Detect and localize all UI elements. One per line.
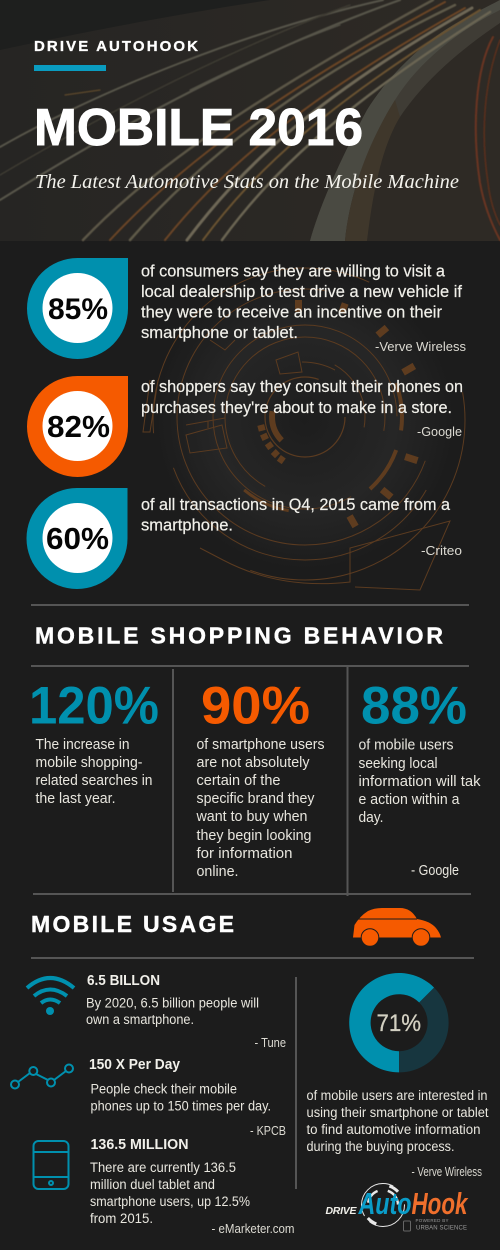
- column: 90 percent: [196, 676, 324, 880]
- subtitle: The Latest Automotive Stats on the Mobile Machine: [35, 171, 459, 193]
- usage: 136.5 million: [34, 1137, 294, 1236]
- column: 120 percent: mobile shopping-: [36, 754, 142, 771]
- stat: 85 percent: -Verve Wireless: [375, 339, 466, 354]
- stat: 82 percent: -Google: [417, 424, 462, 439]
- column: 88 percent: seeking local: [358, 755, 438, 772]
- stat text: of shoppers say they consult their phones on: [141, 378, 463, 396]
- logo: Drive AutoHook: POWERED BY: [416, 1218, 448, 1223]
- logo: Drive AutoHook: Hook: [412, 1186, 469, 1221]
- usage: 150 times per day: People check their mobile: [90, 1082, 237, 1096]
- column: 88 percent: of mobile users: [358, 736, 454, 754]
- stat: 85 percent: local dealership to test drive a new vehicle if: [141, 283, 462, 301]
- stat: 82 percent: [27, 376, 463, 477]
- column: 90 percent: are not absolutely: [196, 754, 310, 771]
- column: 90 percent: for information: [196, 845, 292, 862]
- stat: 60 percent: -Criteo: [421, 543, 462, 558]
- stat: 60 percent: 60%: [46, 521, 109, 556]
- column: 88 percent: - Google: [411, 862, 459, 879]
- icon: line chart: [11, 1064, 73, 1088]
- usage: 136.5 million: - eMarketer.com: [212, 1222, 294, 1236]
- orange drop badge: [27, 376, 128, 477]
- main title: MOBILE 2016: [34, 99, 363, 157]
- usage: 136.5 million: million duel tablet and: [90, 1177, 215, 1192]
- stat: 85 percent: [27, 258, 466, 359]
- stat: 85 percent: they were to receive an incentive on their: [141, 304, 443, 322]
- heading: mobile shopping behavior: MOBILE SHOPPING BEHAVIOR: [35, 622, 443, 648]
- donut caption: to find automotive information: [306, 1122, 480, 1137]
- usage: 136.5 million: There are currently 136.5: [90, 1160, 236, 1175]
- stat text: of all transactions in Q4, 2015 came from a: [141, 496, 451, 514]
- usage: 6.5 billion: 6.5 BILLON: [87, 973, 160, 989]
- column: 120 percent: the last year.: [36, 790, 116, 807]
- usage: 136.5 million: smartphone users, up 12.5%: [90, 1194, 250, 1209]
- usage: 150 times per day: 150 X Per Day: [89, 1057, 180, 1073]
- column: 90 percent: they begin looking: [196, 827, 312, 844]
- heading: mobile usage: MOBILE USAGE: [31, 911, 234, 937]
- column: 90 percent: online.: [196, 863, 238, 880]
- column: 120 percent: 120%: [29, 676, 159, 736]
- column: 88 percent: 88%: [361, 676, 467, 736]
- brand name: DRIVE AUTOHOOK: [34, 38, 198, 55]
- column: 88 percent: information will tak: [358, 773, 481, 790]
- usage: 6.5 billion: own a smartphone.: [86, 1012, 194, 1027]
- usage: 150 times per day: - KPCB: [250, 1124, 286, 1138]
- stat: 82 percent: purchases they're about to make in a store.: [141, 399, 452, 417]
- teal drop badge: [26, 488, 128, 589]
- donut chart: 71 percent: 71%: [376, 1010, 421, 1037]
- column: 88 percent: [358, 676, 481, 879]
- donut caption: - Verve Wireless: [412, 1165, 482, 1179]
- donut caption: using their smartphone or tablet: [306, 1105, 489, 1120]
- accent bar: [34, 65, 106, 71]
- column: 90 percent: want to buy when: [196, 808, 308, 825]
- column: 90 percent: of smartphone users: [196, 736, 324, 753]
- stat text: of consumers say they are willing to visit a: [141, 262, 446, 280]
- column: 120 percent: related searches in: [36, 772, 152, 789]
- usage: 150 times per day: phones up to 150 times per day.: [90, 1098, 271, 1114]
- donut caption: of mobile users are interested in: [306, 1088, 488, 1103]
- logo: Drive AutoHook: DRIVE: [326, 1205, 357, 1217]
- header panel with highway photo: [0, 0, 500, 241]
- column: 90 percent: certain of the: [196, 772, 280, 789]
- usage: 150 times per day: [11, 1057, 286, 1138]
- logo: Drive AutoHook: Auto: [358, 1186, 412, 1221]
- column: 88 percent: day.: [358, 809, 384, 826]
- usage: 6.5 billion: By 2020, 6.5 billion people will: [86, 996, 259, 1010]
- column: 88 percent: e action within a: [358, 791, 460, 808]
- stat: 85 percent: 85%: [48, 293, 108, 326]
- stat: 85 percent: smartphone or tablet.: [141, 324, 298, 342]
- donut caption: [306, 1088, 489, 1179]
- usage: 136.5 million: from 2015.: [90, 1211, 153, 1226]
- icon: tablet: [34, 1141, 68, 1189]
- stat: 60 percent: [26, 488, 462, 589]
- icon: car: [353, 908, 441, 946]
- column: 120 percent: [29, 676, 159, 807]
- column: 90 percent: 90%: [201, 676, 310, 736]
- donut chart: 71 percent: [349, 973, 449, 1072]
- column: 120 percent: The increase in: [36, 736, 130, 753]
- logo: Drive AutoHook: [326, 1184, 469, 1232]
- usage: 6.5 billion: - Tune: [254, 1036, 286, 1050]
- logo: Drive AutoHook: URBAN SCIENCE: [416, 1226, 467, 1232]
- stat: 82 percent: 82%: [47, 409, 110, 444]
- teal drop badge: [27, 258, 128, 359]
- column: 90 percent: specific brand they: [196, 790, 315, 807]
- donut caption: during the buying process.: [306, 1139, 454, 1154]
- stat: 60 percent: smartphone.: [141, 516, 233, 534]
- usage: 6.5 billion: [27, 973, 286, 1050]
- icon: wifi: [27, 978, 74, 1015]
- usage: 136.5 million: 136.5 MILLION: [90, 1137, 188, 1153]
- background circuit rings graphic: [143, 260, 465, 590]
